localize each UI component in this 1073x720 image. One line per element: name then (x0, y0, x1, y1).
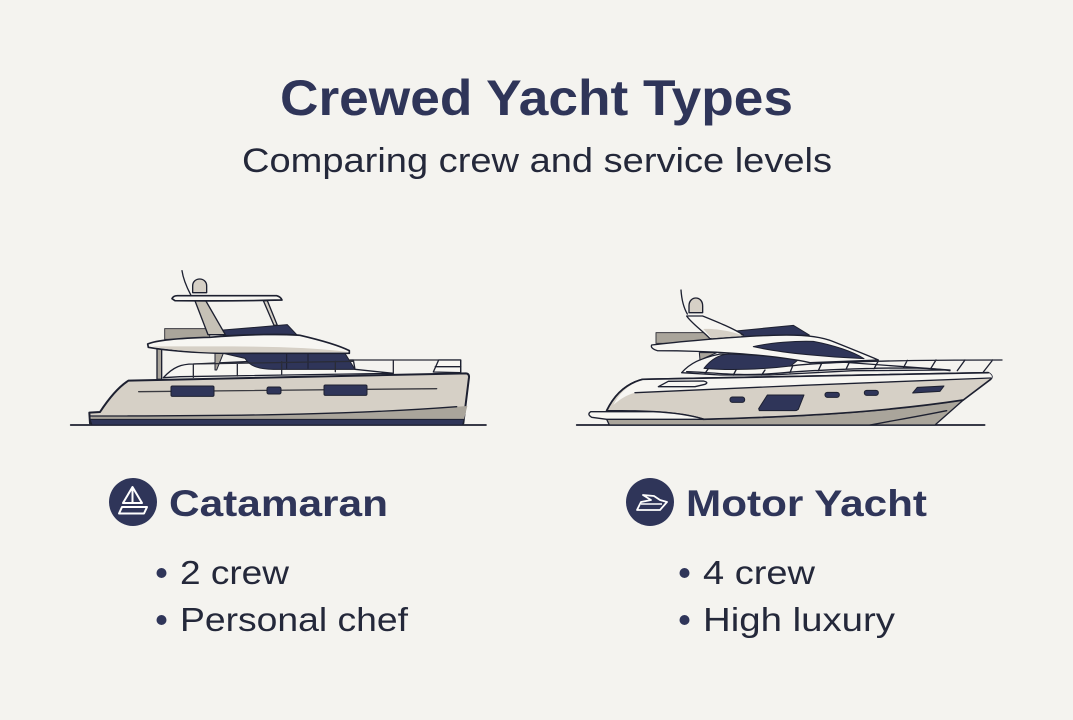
upper glass (223, 325, 297, 335)
hull stripe and windows (139, 389, 437, 392)
lower deck cabin (163, 360, 393, 378)
heading: motor yacht: Motor Yacht (686, 483, 927, 524)
hull windows (730, 397, 745, 402)
list: motor yacht facts (680, 554, 896, 638)
hatch (658, 381, 707, 387)
foredeck rail (687, 360, 1002, 375)
hull navy keel (90, 419, 464, 425)
list: catamaran facts (156, 554, 409, 638)
list: catamaran facts: Personal chef (180, 601, 409, 638)
upper cabin back (165, 329, 210, 339)
flybridge deck (651, 335, 878, 363)
radar dome (689, 298, 703, 313)
list: motor yacht facts: 4 crew (703, 554, 815, 591)
flybridge deck (148, 334, 349, 353)
radar dome (193, 279, 207, 293)
lower hull (607, 400, 963, 425)
flybridge window (753, 341, 864, 359)
thin strut (263, 301, 277, 325)
antenna (182, 271, 191, 295)
icon: motor yacht (626, 478, 674, 526)
illustration: motor yacht (577, 290, 1002, 425)
subtitle: Comparing crew and service levels (242, 142, 832, 180)
flybridge glass (736, 325, 809, 337)
heading: catamaran: Catamaran (169, 483, 388, 524)
swim platform (589, 412, 705, 419)
illustration: catamaran (71, 271, 486, 425)
saloon glass (704, 354, 798, 370)
main hull (607, 373, 992, 419)
lower superstructure (682, 354, 950, 375)
panel: catamaran (109, 478, 409, 638)
tower strut (195, 300, 225, 335)
title: Crewed Yacht Types (280, 70, 793, 126)
rail (193, 360, 461, 377)
rear block (699, 353, 717, 360)
rear upper block (656, 333, 711, 343)
lower cabin glass (223, 353, 355, 369)
hard top (172, 296, 282, 301)
waterline (577, 422, 985, 427)
mast base (215, 353, 223, 370)
icon: sailboat (109, 478, 157, 526)
hull (89, 373, 469, 423)
hull upper white band (613, 373, 992, 405)
list: motor yacht facts: High luxury (703, 601, 896, 638)
rear post (157, 347, 162, 379)
antenna (681, 290, 687, 314)
waterline (71, 422, 486, 427)
radar arch (687, 316, 743, 339)
panel: motor yacht (626, 478, 927, 638)
hull shadow (91, 406, 467, 419)
list: catamaran facts: 2 crew (180, 554, 289, 591)
